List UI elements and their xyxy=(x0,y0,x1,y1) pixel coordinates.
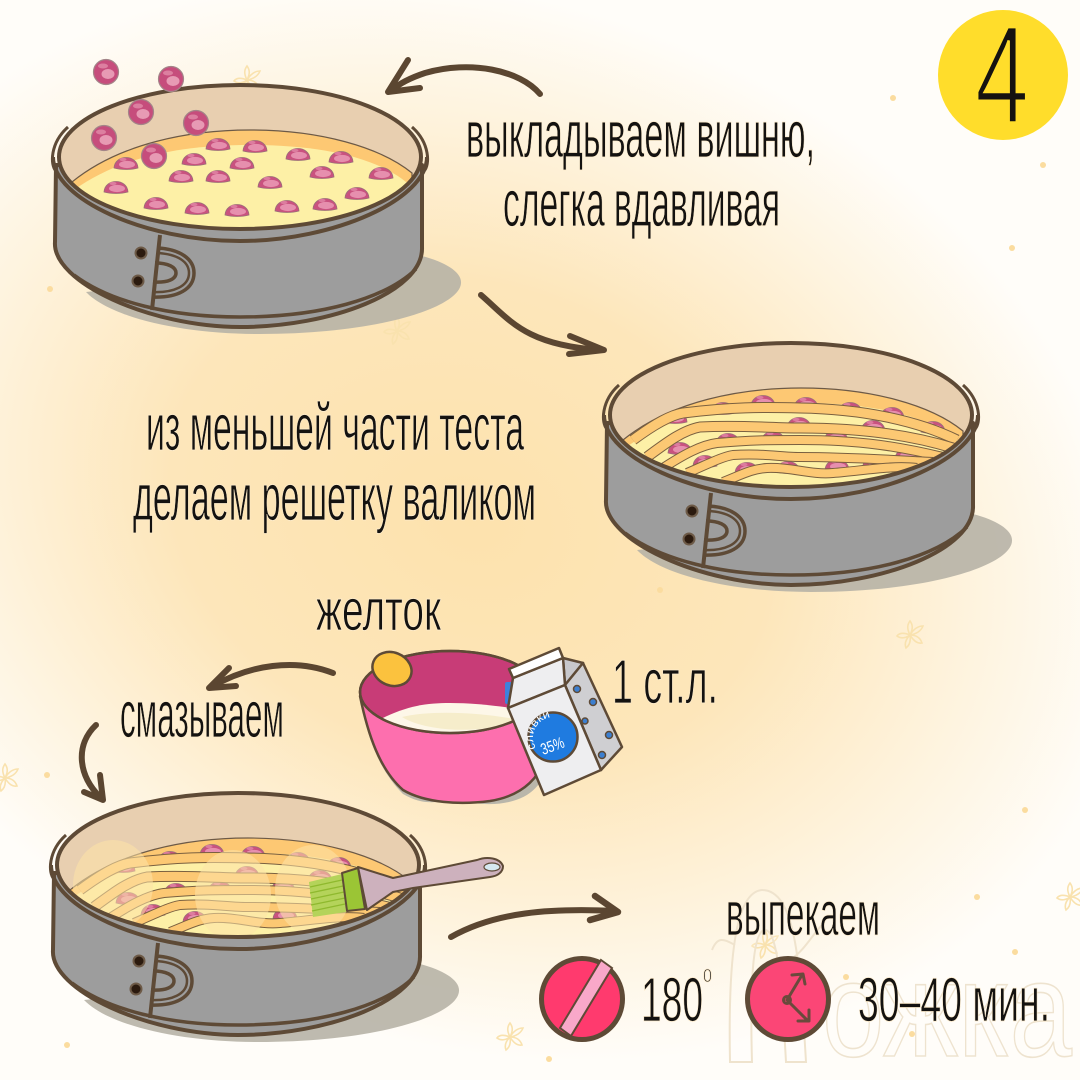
icon: oven temperature xyxy=(542,958,622,1040)
temperature value xyxy=(641,966,712,1035)
step number badge: 4 xyxy=(975,0,1029,153)
arrow to pan 3 xyxy=(82,725,103,800)
watermark: Ложка xyxy=(712,890,1073,1080)
temperature value: 0 xyxy=(703,966,712,986)
pan 1: cherries pressed into dough xyxy=(52,60,461,334)
arrow to pan 2 xyxy=(481,295,604,354)
step number badge xyxy=(938,0,1068,153)
egg yolk xyxy=(367,646,417,692)
embedded cherries xyxy=(104,138,393,216)
label: yolk: желток xyxy=(316,578,441,643)
text: lay out the cherries xyxy=(466,97,815,240)
carton label: сливки xyxy=(527,712,550,750)
pastry brush xyxy=(309,858,503,917)
cherries under lattice xyxy=(663,396,945,474)
arrow to brush label xyxy=(209,665,333,688)
text: make the lattice: делаем решетку валиком xyxy=(133,460,536,534)
carton label xyxy=(527,712,567,759)
arrow to baking step xyxy=(451,896,618,937)
pan 2: dough lattice xyxy=(603,343,1012,592)
text: make the lattice xyxy=(133,390,536,534)
icon: clock xyxy=(748,958,828,1040)
text: смазываем xyxy=(120,677,284,751)
lattice strips xyxy=(633,408,957,482)
label: bake: выпекаем xyxy=(726,880,880,949)
text: make the lattice: из меньшей части теста xyxy=(146,390,524,464)
text: lay out the cherries: слегка вдавливая xyxy=(503,166,780,240)
temperature value: 180 xyxy=(641,966,703,1035)
pan 3: brushed lattice xyxy=(50,793,459,1042)
label: one tablespoon: 1 ст.л. xyxy=(612,648,718,717)
bowl with yolk xyxy=(360,646,545,804)
cherries under lattice xyxy=(111,844,351,924)
cream carton xyxy=(506,646,624,796)
carton label: 35% xyxy=(539,735,567,759)
lattice strips with glaze xyxy=(73,840,404,940)
arrow to pan 1 xyxy=(388,60,540,94)
falling cherries xyxy=(92,60,208,168)
